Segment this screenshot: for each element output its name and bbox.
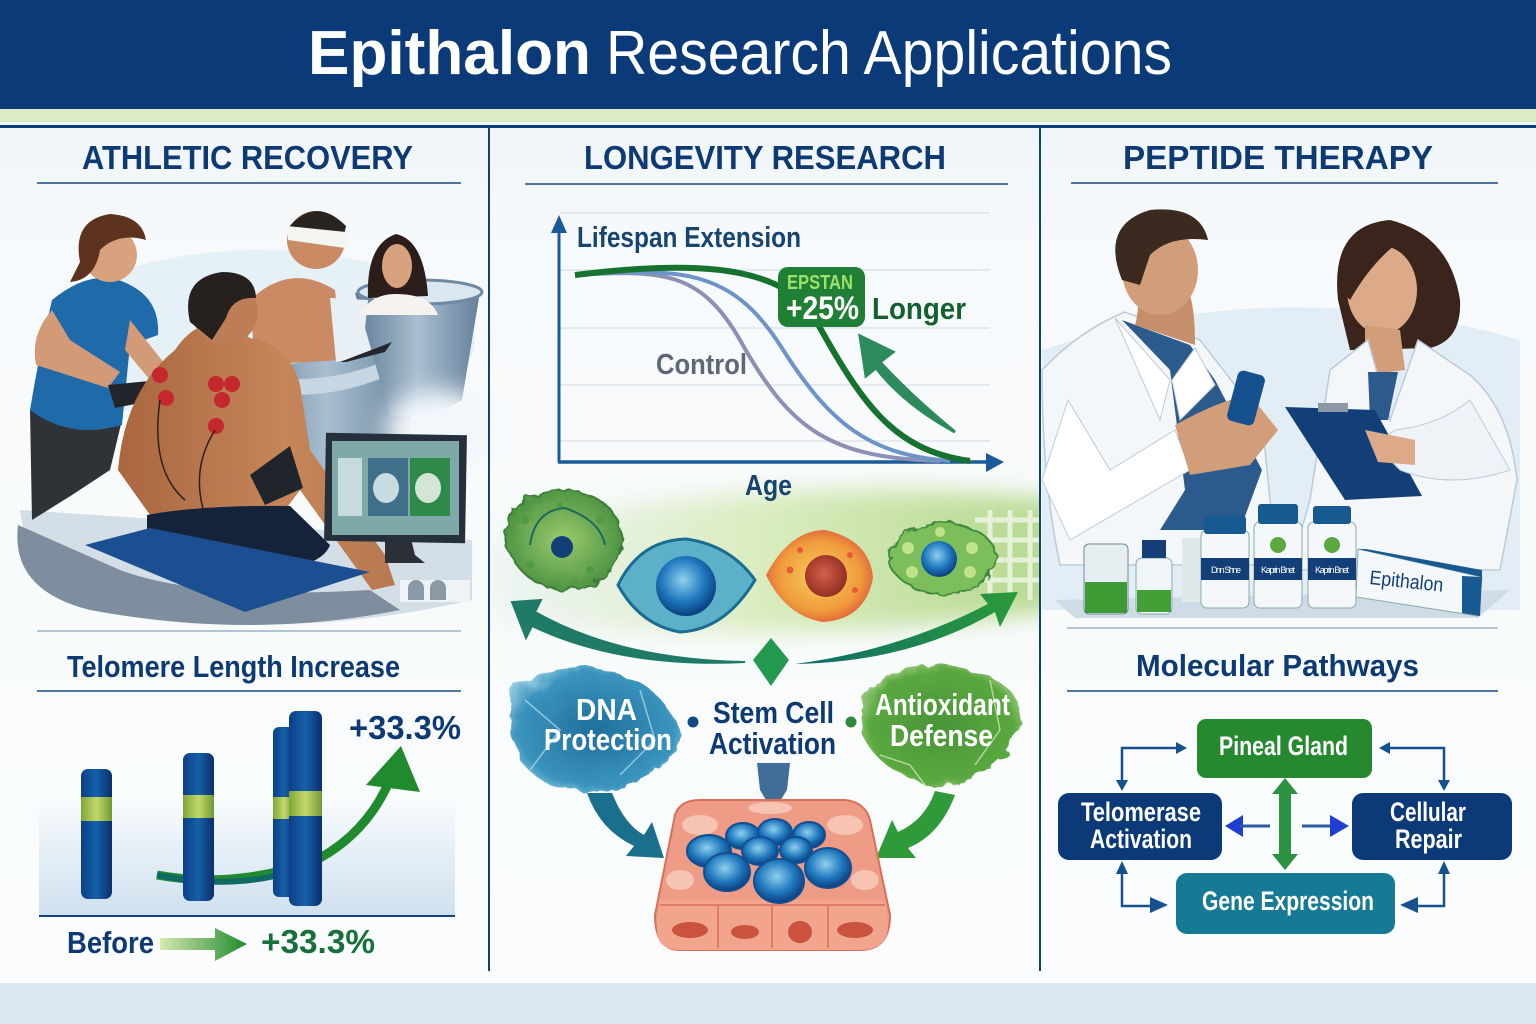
bottles [1084,504,1356,614]
illustration: tissue block [655,800,890,950]
arrow: center down [757,763,790,812]
arrow: rising green trend [157,746,420,882]
researcher: woman [1285,220,1517,570]
label: control: Control [656,349,747,381]
product box: epithalon [1356,549,1482,616]
title banner [0,0,1536,128]
label: +33.3%: +33.3% [349,709,461,746]
node: telomerase activation: Activation [1090,824,1192,854]
label: longer: Longer [872,291,966,326]
bar: middle [183,753,214,901]
node: cellular repair: Repair [1395,824,1462,854]
icon: green diamond [753,638,789,686]
woman in tub [360,234,438,315]
curve: control [575,273,940,461]
panel: athletic recovery [17,139,495,961]
arrow: vertical double green [1272,778,1298,870]
node: gene expression: Gene Expression [1202,886,1374,916]
arrow: sweep right [795,592,1018,664]
node: telomerase activation: Telomerase [1081,797,1201,827]
node: dna protection [510,668,682,792]
person in tub with headband [250,211,392,365]
badge: epstan +25%: +25% [786,290,859,326]
badge: epstan +25%: EPSTAN [787,272,853,294]
cell: orange [766,530,873,622]
node: dna protection: Protection [544,722,672,757]
curve: epithalon [575,268,970,461]
heading: longevity research: LONGEVITY RESEARCH [584,139,946,176]
panel: peptide therapy [1042,139,1520,934]
node: antioxidant defense: Defense [890,718,993,753]
heading: molecular pathways: Molecular Pathways [1136,648,1419,683]
legend: before to +33.3%: Before [67,925,154,960]
bar: after [273,711,322,906]
node: stem cell activation: Stem Cell [713,695,834,730]
label: age: Age [745,470,792,502]
node: stem cell activation: Activation [709,726,836,761]
bottles: Dnn Shne [1211,565,1241,575]
product box: epithalon: Epithalon [1368,567,1444,597]
diagram: molecular pathways [1058,719,1512,934]
node: cellular repair [1352,793,1512,860]
cell band background [490,490,1060,633]
arrow: blue right [1302,815,1349,837]
label: lifespan extension: Lifespan Extension [577,222,801,254]
node: cellular repair: Cellular [1390,797,1466,827]
node: gene expression [1176,873,1395,934]
connector arrows [1122,748,1444,906]
blue mat [85,528,370,612]
title: Research Applications [606,19,1172,88]
arrow: left to tissue [587,793,664,858]
cells row [504,490,998,632]
arrow: sweep left [512,600,745,663]
researcher: man [1042,209,1278,565]
heading: telomere length increase: Telomere Length Increase [67,649,400,684]
legend: before to +33.3% [67,923,375,961]
illustration: researchers with products [1042,209,1520,618]
node: telomerase activation [1058,793,1222,860]
node: antioxidant defense: Antioxidant [875,687,1010,722]
badge: epstan +25% [778,267,865,327]
node: pineal gland [1197,719,1372,778]
node: antioxidant defense [862,665,1022,787]
monitor [324,433,467,563]
cell: green textured [504,490,622,590]
cell: blue [618,539,755,632]
arrow: blue left-right [1225,815,1270,837]
panel: longevity research [490,139,1060,950]
chart: telomere bars [39,709,461,916]
arrow: right to tissue [876,791,955,858]
bar: before [81,769,112,899]
node: stem cell activation [709,695,836,761]
bottles: Kaprin Bnet [1315,565,1349,575]
cell: green with blue nucleus [887,522,998,595]
heading: athletic recovery: ATHLETIC RECOVERY [82,139,413,176]
chart: lifespan survival curves [551,213,1004,502]
illustration: athletes in recovery [17,211,495,625]
title: Epithalon [308,19,591,88]
arrow: up-left green [860,336,955,432]
node: pineal gland: Pineal Gland [1219,731,1348,761]
ice bath tub [235,280,495,495]
athlete with electrodes [118,272,395,590]
heading: peptide therapy: PEPTIDE THERAPY [1123,139,1433,176]
node: dna protection: DNA [576,692,637,727]
legend: before to +33.3%: +33.3% [261,923,375,960]
therapist in blue [30,214,168,520]
bottles: Kaprin Bnet [1261,565,1295,575]
shelf [1055,590,1510,618]
